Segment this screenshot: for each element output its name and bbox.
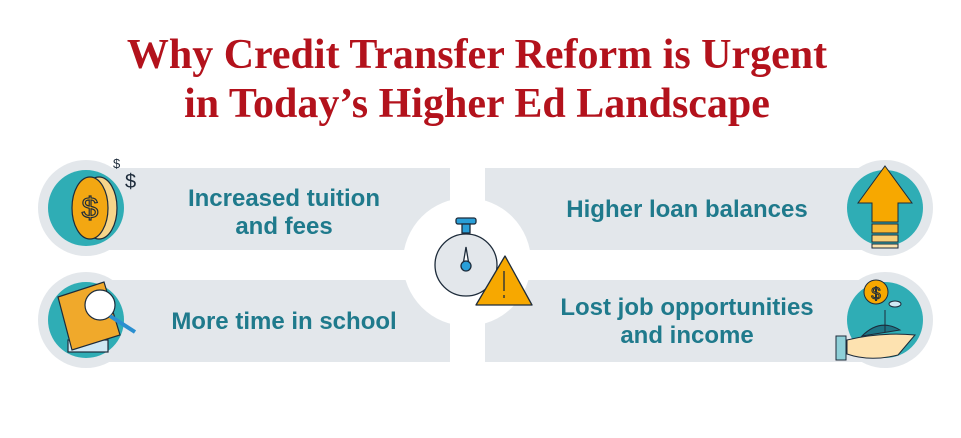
title: in Today’s Higher Ed Landscape — [184, 81, 770, 127]
text: more time: More time in school — [171, 308, 397, 335]
panel: lost job opportunities — [560, 280, 923, 360]
panel: increased tuition: $ — [125, 171, 136, 193]
panel: lost job opportunities: Lost job opportunities — [560, 294, 814, 321]
icon: hand with coin plant — [836, 280, 915, 360]
icon: coin: $ — [82, 192, 99, 225]
icon: coin — [72, 177, 117, 239]
panel: increased tuition: and fees — [235, 213, 333, 240]
text: increased tuition: Increased tuition — [188, 185, 380, 212]
panel: higher loan balances: Higher loan balances — [566, 196, 808, 223]
icon: stopwatch and warning — [435, 218, 532, 305]
icon: book — [58, 282, 135, 352]
panel: higher loan balances — [566, 166, 923, 248]
center circle — [403, 198, 531, 326]
panel: more time in school — [48, 282, 397, 358]
panel: increased tuition — [48, 156, 380, 246]
panel: increased tuition: $ — [113, 156, 121, 171]
title — [127, 32, 827, 127]
bars background — [38, 160, 933, 368]
icon: arrow up — [858, 166, 912, 248]
icon: hand with coin plant: $ — [871, 284, 881, 303]
title: Why Credit Transfer Reform is Urgent — [127, 32, 827, 78]
panel: lost job opportunities: and income — [620, 322, 754, 349]
